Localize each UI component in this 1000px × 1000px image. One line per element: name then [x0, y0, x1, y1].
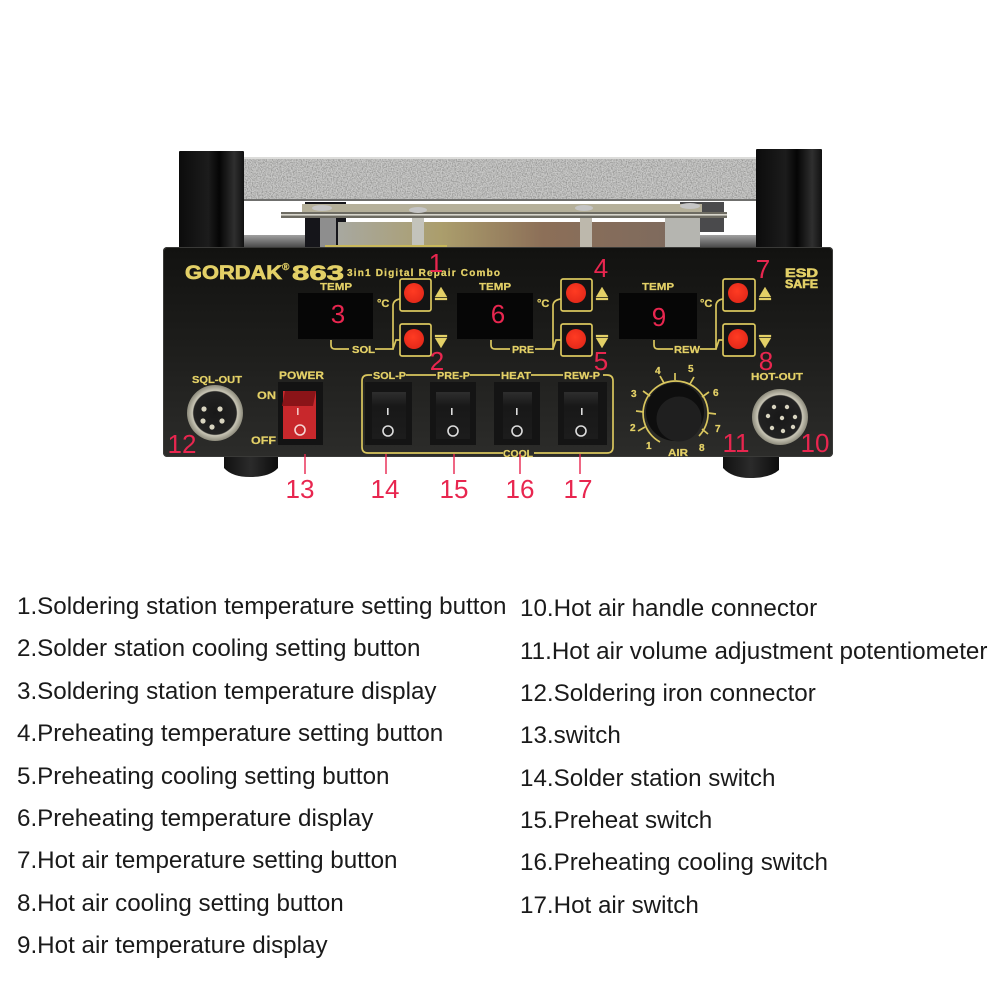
air volume knob with scale: 5	[688, 364, 694, 375]
item 12: 12.Soldering iron connector	[520, 680, 816, 707]
item 1: 1.Soldering station temperature setting button	[17, 593, 506, 620]
red callout numbers: 3	[331, 299, 345, 329]
displays and button group: preheater: PRE	[512, 345, 534, 356]
red callout numbers: 11	[722, 428, 750, 458]
rubber feet	[224, 455, 779, 478]
power rocker switch	[251, 370, 324, 447]
hot air switch	[558, 371, 607, 445]
left support post	[179, 151, 244, 248]
red callout numbers: 1	[429, 248, 443, 278]
item 7: 7.Hot air temperature setting button	[17, 847, 398, 874]
aluminium heating plate	[244, 157, 756, 201]
air volume knob with scale: 7	[715, 424, 721, 435]
item 16: 16.Preheating cooling switch	[520, 849, 828, 876]
red callout numbers: 12	[168, 429, 196, 459]
red callout numbers: 17	[564, 474, 592, 504]
red callout numbers: 4	[594, 253, 608, 283]
heat cool switch: COOL	[503, 449, 533, 460]
heat cool switch: HEAT	[501, 371, 531, 382]
red callout numbers	[168, 248, 829, 504]
red callout numbers: 16	[506, 474, 534, 504]
item 11: 11.Hot air volume adjustment potentiometer	[520, 638, 987, 665]
item 8: 8.Hot air cooling setting button	[17, 890, 344, 917]
red callout numbers: 5	[594, 346, 608, 376]
air volume knob with scale: 2	[630, 423, 636, 434]
gold switch frame	[362, 375, 613, 453]
red callout numbers: 9	[652, 302, 666, 332]
item 4: 4.Preheating temperature setting button	[17, 720, 443, 747]
red callout numbers: 15	[440, 474, 468, 504]
red callout numbers: 7	[756, 254, 770, 284]
air volume knob with scale	[630, 364, 721, 459]
solder station switch: SOL-P	[373, 371, 406, 382]
ESD SAFE mark	[785, 268, 818, 291]
power rocker switch: ON	[257, 390, 276, 402]
black control panel	[163, 247, 833, 457]
displays and button group: solder station: TEMP	[320, 282, 352, 293]
air volume knob with scale: 1	[646, 441, 652, 452]
legend: items 1 to 9	[17, 593, 506, 959]
brand heading: 863	[292, 262, 344, 285]
displays and button group: hot air: °C	[700, 298, 712, 310]
ESD SAFE mark: ESD	[785, 268, 818, 280]
air volume knob with scale: 3	[631, 389, 637, 400]
item 15: 15.Preheat switch	[520, 807, 712, 834]
brand heading	[185, 262, 500, 285]
air volume knob with scale: 4	[655, 366, 661, 377]
brand heading: 3in1 Digital Repair Combo	[347, 268, 500, 279]
item 17: 17.Hot air switch	[520, 892, 699, 919]
red callout numbers: 14	[371, 474, 399, 504]
displays and button group: preheater: TEMP	[479, 282, 511, 293]
item 6: 6.Preheating temperature display	[17, 805, 373, 832]
brand heading: GORDAK	[185, 263, 282, 284]
soldering iron connector	[187, 375, 243, 441]
right support post	[756, 149, 822, 248]
item 3: 3.Soldering station temperature display	[17, 678, 436, 705]
item 13: 13.switch	[520, 722, 621, 749]
air volume knob with scale: 6	[713, 388, 719, 399]
displays and button group: solder station	[298, 279, 447, 356]
soldering iron connector: SQL-OUT	[192, 375, 242, 386]
displays and button group: solder station: °C	[377, 298, 389, 310]
air volume knob with scale: 8	[699, 443, 705, 454]
displays and button group: preheater: °C	[537, 298, 549, 310]
air volume knob with scale: AIR	[668, 448, 689, 459]
power rocker switch: POWER	[279, 370, 324, 382]
red callout numbers: 8	[759, 346, 773, 376]
red callout numbers: 13	[286, 474, 314, 504]
hot air switch: REW-P	[564, 371, 600, 382]
brand heading: ®	[282, 262, 290, 273]
product photo: GORDAK 863 front panel	[163, 149, 833, 504]
power rocker switch: OFF	[251, 435, 276, 447]
hot air handle connector: HOT-OUT	[751, 372, 803, 383]
red callout numbers: 10	[801, 428, 829, 458]
ESD SAFE mark: SAFE	[785, 279, 818, 291]
item 9: 9.Hot air temperature display	[17, 932, 328, 959]
displays and button group: hot air: REW	[674, 345, 701, 356]
displays and button group: hot air	[619, 279, 771, 356]
hot air handle connector	[751, 372, 808, 445]
preheat switch	[430, 371, 476, 445]
mesh preheat tray	[281, 203, 727, 218]
item 5: 5.Preheating cooling setting button	[17, 763, 390, 790]
item 2: 2.Solder station cooling setting button	[17, 635, 420, 662]
legend: items 10 to 17	[520, 595, 988, 919]
displays and button group: hot air: TEMP	[642, 282, 674, 293]
item 14: 14.Solder station switch	[520, 765, 775, 792]
heat cool switch	[494, 371, 540, 460]
red callout numbers: 2	[430, 346, 444, 376]
red callout numbers: 6	[491, 299, 505, 329]
preheat switch: PRE-P	[437, 371, 470, 382]
displays and button group: preheater	[457, 279, 608, 356]
solder station switch	[365, 371, 412, 445]
rear housing behind the plate	[244, 202, 756, 248]
item 10: 10.Hot air handle connector	[520, 595, 817, 622]
displays and button group: solder station: SOL	[352, 345, 375, 356]
